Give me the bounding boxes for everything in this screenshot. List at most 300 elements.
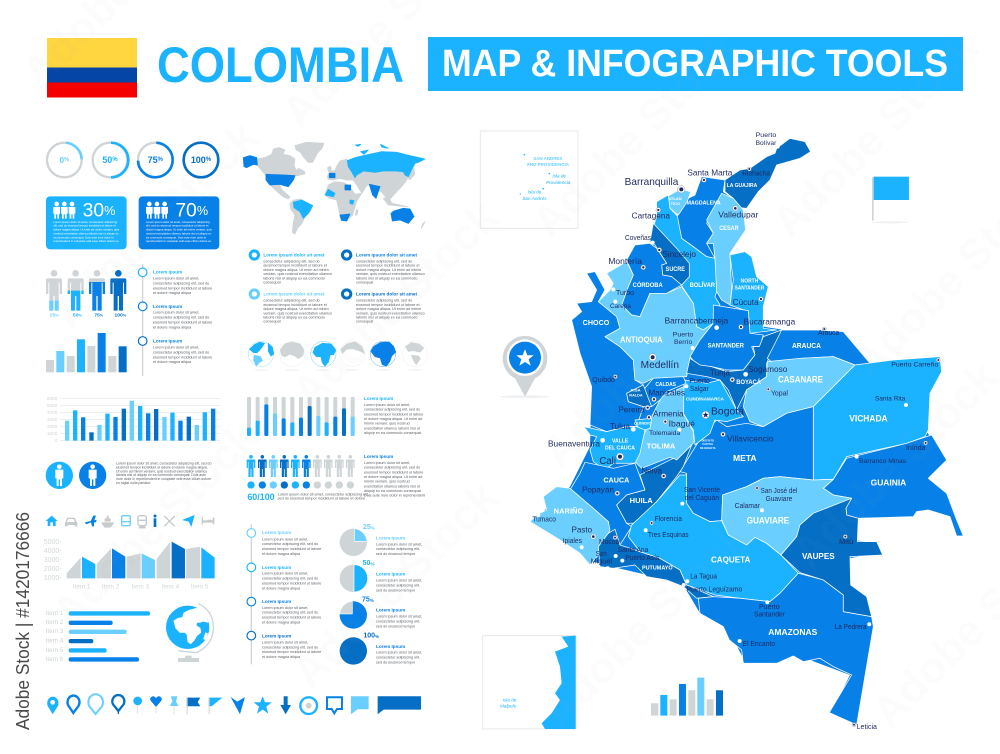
horizontal bar chart: Item 5: [46, 647, 64, 654]
paragraph beside badges: Lorem ipsum dolor sit amet, consectetur adipiscing elit, sed do: [116, 461, 211, 465]
city labels: Coveñas: [625, 235, 651, 242]
department labels: ANTIOQUIA: [620, 335, 663, 345]
department labels: CHOCO: [583, 318, 609, 327]
city labels: Medellín: [641, 360, 679, 371]
text: people row: eiusmod tempor incididunt ut labore: [364, 470, 423, 474]
city labels: Armenia: [653, 408, 684, 418]
city labels: Puerto Leguízamo: [687, 586, 742, 593]
paragraph beside badges: [116, 461, 211, 485]
timeline with four entries: consectetur adipiscing elit, sed do: [262, 577, 318, 581]
text: people row: exercitation ullamco laboris nisi ut: [364, 484, 421, 488]
text: people row: [364, 454, 426, 498]
percent pies with text: consectetur adipiscing elit,: [376, 547, 420, 551]
middle column, upper part: [248, 251, 428, 371]
department labels: SANTANDER: [708, 344, 745, 350]
department labels: VAUPES: [802, 551, 835, 561]
department labels: VICHADA: [849, 413, 888, 423]
area column chart: Item 1: [73, 583, 91, 590]
percent rings: 0%: [59, 155, 69, 165]
multi-year bar chart: 0: [55, 438, 58, 443]
city labels: El Encanto: [743, 641, 775, 648]
card: 30 percent: nostrud exercitation ullamco laboris nisi ut aliquip ex: [53, 231, 119, 235]
timeline with four entries: Lorem Ipsum: [262, 633, 291, 638]
timeline with four entries: consectetur adipiscing elit, sed do: [262, 645, 318, 649]
department labels: CASANARE: [778, 375, 823, 385]
area column chart: 1000-: [44, 575, 62, 582]
city labels: Riohacha: [742, 170, 770, 177]
department labels: NARIÑO: [554, 506, 583, 515]
city labels: La Pedrera: [835, 624, 867, 631]
transport and travel icons: [46, 514, 214, 528]
city labels: Puerto: [756, 132, 777, 139]
location pin with star: [500, 336, 550, 398]
four key-point text blocks: eiusmod tempor incididunt ut labore et: [263, 264, 328, 268]
card: 70 percent: [139, 196, 219, 249]
department labels: MAGDALENA: [687, 200, 721, 206]
text: people row: minim veniam, quis nostrud: [364, 480, 410, 484]
text: people row: et dolore magna aliqua. Ut enim ad: [364, 475, 422, 479]
city labels: Santa Marta: [687, 168, 732, 178]
text: progress bars: Lorem Ipsum: [364, 396, 393, 401]
four key-point text blocks: consequat: [263, 320, 282, 324]
watermark: Adobe Stock: [523, 22, 748, 247]
percent pies with text: Lorem Ipsum: [376, 644, 405, 649]
department labels: CUNDINAMARCA: [686, 397, 724, 403]
four key-point text blocks: consectetur adipiscing elit, sed do: [356, 299, 412, 303]
department labels: SUCRE: [666, 266, 685, 273]
timeline with three entries: eiusmod tempor incididunt ut labore: [153, 286, 212, 290]
four key-point text blocks: Lorem ipsum dolor sit amet: [263, 291, 325, 296]
four key-point text blocks: laboris nisi ut aliquip ex ea commodo: [356, 315, 417, 319]
city labels: San José del: [761, 488, 798, 495]
card: 30 percent: 30%: [83, 200, 115, 221]
timeline with four entries: Lorem Ipsum: [262, 565, 291, 570]
percent pies with text: 100%: [363, 632, 380, 639]
city labels: Mocoa: [599, 539, 619, 546]
timeline with four entries: eiusmod tempor incididunt ut labore: [262, 616, 321, 620]
row of six globes: [248, 341, 428, 371]
timeline with three entries: et dolore magna aliqua: [153, 325, 192, 329]
city labels: Santa Ana: [618, 547, 648, 554]
horizontal bar chart: Item 1: [46, 610, 64, 617]
city labels: Montería: [608, 256, 642, 266]
card: 70 percent: dolore magna aliqua. Ut enim ad minim veniam, quis: [146, 228, 212, 232]
card: 70 percent: nostrud exercitation ullamco laboris nisi ut aliquip ex: [146, 231, 212, 235]
card: 30 percent: Lorem ipsum dolor sit amet, consectetur adipiscing: [53, 220, 117, 224]
city labels: Neiva: [641, 465, 662, 475]
horizontal bar chart: Item 2: [46, 619, 64, 626]
department labels: CESAR: [719, 225, 739, 232]
four key-point text blocks: consectetur adipiscing elit, sed do: [263, 260, 320, 264]
people percent figures: 100%: [115, 312, 127, 318]
watermark: Adobe Stock: [763, 22, 988, 247]
four key-point text blocks: veniam, quis nostrud exercitation ullamco: [356, 272, 425, 276]
city labels: Puerto: [759, 604, 780, 611]
area column chart: 5000-: [44, 539, 62, 546]
city labels: Florencia: [655, 516, 682, 523]
card: 70 percent: 70%: [175, 200, 208, 221]
city labels: Tres Esquinas: [648, 532, 689, 539]
60 of 100 people row: 60/100: [247, 492, 275, 502]
timeline with three entries: consectetur adipiscing elit, sed do: [153, 281, 209, 285]
text: people row: Lorem Ipsum: [364, 454, 393, 459]
department labels: NORTH: [741, 279, 758, 285]
horizontal bar chart: Item 6: [46, 656, 64, 663]
department labels: ARAUCA: [792, 341, 821, 350]
timeline with four entries: eiusmod tempor incididunt ut labore: [262, 650, 321, 654]
four key-point text blocks: dolore magna aliqua. Ut enim ad minim: [356, 307, 421, 311]
four key-point text blocks: consequat: [356, 280, 374, 284]
card: 70 percent: reprehenderit in voluptate velit esse cillum dolore eu: [146, 239, 212, 243]
city labels: Salgar: [690, 386, 709, 393]
department labels: PUTUMAYO: [642, 565, 673, 571]
percent pies with text: consectetur adipiscing elit,: [376, 583, 420, 587]
timeline with three entries: et dolore magna aliqua: [153, 360, 192, 364]
department labels: TICO: [671, 201, 680, 206]
paragraph beside badges: Ut enim ad minim veniam, quis nostrud exercitation ullamco: [116, 469, 207, 473]
map pin icon set, left: [47, 694, 245, 714]
department labels: DEL CAUCA: [605, 445, 635, 451]
percent pies with text: sed do eiusmod tempor: [376, 624, 416, 628]
city labels: del Caguán: [685, 495, 719, 502]
four key-point text blocks: dolore magna aliqua. Ut enim ad minim: [263, 268, 329, 272]
timeline with four entries: et dolore magna aliqua: [262, 586, 301, 590]
text: progress bars: Lorem ipsum dolor sit amet,: [364, 403, 410, 407]
timeline with four entries: et dolore magna aliqua: [262, 620, 301, 624]
timeline with four entries: Lorem ipsum dolor sit amet,: [262, 572, 308, 576]
four key-point text blocks: consectetur adipiscing elit, sed do: [356, 260, 412, 264]
department labels: BOLÍVAR: [690, 280, 715, 289]
percent pies with text: 25%: [363, 524, 376, 531]
vertical progress bars: [247, 397, 355, 436]
bar chart: [46, 333, 127, 372]
city labels: Puerto: [689, 378, 710, 385]
flag pin: [872, 177, 909, 223]
people percent figures: 50%: [73, 312, 82, 318]
city labels: Ibagué: [669, 418, 695, 428]
city labels: Sogamoso: [748, 364, 788, 374]
city labels: Tulua: [610, 421, 630, 431]
department labels: DISTRITO: [702, 438, 714, 442]
city labels: Popayán: [582, 485, 614, 495]
city labels: Pereira: [618, 405, 645, 415]
text: progress bars: exercitation ullamco laboris nisi ut: [364, 426, 421, 430]
people percent figures: 75%: [94, 312, 104, 318]
multi-year bar chart: 1000: [47, 431, 58, 436]
percent pies with text: [340, 524, 422, 665]
stock id side label: Adobe Stock | #1420176666: [13, 512, 33, 730]
city labels: San Vicente: [684, 487, 720, 494]
city labels: Cartagena: [632, 211, 670, 221]
text: progress bars: aliquip ex ea commodo consequat.: [364, 431, 422, 435]
percent pies with text: Lorem ipsum dolor sit amet,: [376, 651, 422, 655]
card: 30 percent: reprehenderit in voluptate velit esse cillum dolore eu: [53, 239, 119, 243]
timeline with four entries: Lorem ipsum dolor sit amet,: [262, 606, 308, 610]
department labels: RISA: [631, 389, 641, 393]
four key-point text blocks: consectetur adipiscing elit, sed do: [263, 299, 320, 303]
city labels: Miguel: [591, 558, 612, 565]
text: progress bars: eiusmod tempor incididunt ut labore: [364, 412, 423, 416]
timeline with three entries: Lorem Ipsum: [153, 338, 182, 343]
timeline with three entries: Lorem Ipsum: [153, 304, 182, 309]
department labels: CALDAS: [655, 382, 676, 388]
timeline with four entries: Lorem Ipsum: [262, 530, 291, 535]
department labels: HUILA: [630, 496, 653, 505]
watermark: Adobe Stock: [533, 252, 758, 477]
inset: Isla de Malpelo: Isla de: [503, 697, 517, 702]
card: 70 percent: Lorem ipsum dolor sit amet, consectetur adipiscing: [146, 220, 210, 224]
city labels: Buenaventura: [548, 439, 600, 449]
four key-point text blocks: consequat: [356, 320, 374, 324]
people badges: [46, 462, 106, 489]
multi-year bar chart: [47, 396, 220, 443]
multi-year bar chart: 2000: [47, 424, 58, 429]
city labels: Tunja: [710, 368, 730, 378]
watermark: Adobe Stock: [283, 192, 508, 417]
four key-point text blocks: dolore magna aliqua. Ut enim ad minim: [263, 307, 329, 311]
card: 70 percent: elit, sed do eiusmod tempor incididunt ut labore et: [146, 224, 209, 228]
timeline with four entries: consectetur adipiscing elit, sed do: [262, 611, 318, 615]
percent pies with text: Lorem ipsum dolor sit amet,: [376, 615, 422, 619]
percent pies with text: Lorem ipsum dolor sit amet,: [376, 542, 422, 546]
department labels: META: [733, 453, 757, 463]
city labels: Santa Rita: [875, 395, 906, 402]
paragraph beside badges: eiusmod tempor incididunt ut labore et dolore magna aliqua.: [116, 465, 208, 469]
percent rings: 75%: [148, 155, 164, 165]
percent pies with text: Lorem ipsum dolor sit amet,: [376, 578, 422, 582]
timeline with three entries: Lorem Ipsum: [153, 269, 182, 274]
department labels: AMAZONAS: [768, 627, 818, 637]
percent pies with text: Lorem Ipsum: [376, 535, 405, 540]
country silhouette under departments: [533, 213, 947, 720]
paragraph beside badges: irure dolor in reprehenderit in voluptate velit esse cillum dolore: [116, 477, 211, 481]
multi-year bar chart: 3000: [47, 417, 58, 422]
city labels: Puerto Carreño: [891, 361, 939, 368]
area column chart: 2000-: [44, 566, 62, 573]
timeline with four entries: [247, 524, 321, 664]
text: progress bars: minim veniam, quis nostrud: [364, 422, 410, 426]
city labels: San: [596, 551, 607, 558]
four key-point text blocks: Lorem ipsum dolor sit amet: [263, 252, 325, 257]
department labels: ATLAN: [668, 196, 682, 201]
area column chart: [44, 539, 215, 590]
inset: Isla de Malpelo: Malpelo: [500, 703, 517, 708]
text: progress bars: consectetur adipiscing elit, sed do: [364, 408, 420, 412]
percent pies with text: Lorem Ipsum: [376, 571, 405, 576]
inset: San Andres and Providencia: Isla de: [552, 173, 566, 178]
city labels: Arauca: [818, 330, 839, 337]
paragraph beside badges: laboris nisi ut aliquip ex ea commodo consequat. Duis aute: [116, 473, 206, 477]
timeline with four entries: eiusmod tempor incididunt ut labore: [262, 547, 321, 551]
four key-point text blocks: laboris nisi ut aliquip ex ea commodo: [263, 315, 325, 319]
map pin icon set, right: [254, 696, 421, 714]
city labels: Pasto: [572, 525, 592, 535]
percent pies with text: Lorem Ipsum: [376, 607, 405, 612]
city labels: Bolívar: [756, 140, 777, 147]
multi-year bar chart: 5000: [47, 403, 58, 408]
inset: Isla de Malpelo: [483, 636, 576, 729]
card: 30 percent: elit, sed do eiusmod tempor incididunt ut labore et: [53, 224, 116, 228]
city labels: Bogotá: [711, 406, 744, 417]
city labels: Ipiales: [563, 538, 582, 545]
four key-point text blocks: veniam, quis nostrud exercitation ullamco: [263, 272, 332, 276]
city labels: Santander: [754, 611, 786, 618]
city labels: Calamar: [735, 503, 761, 510]
timeline with four entries: et dolore magna aliqua: [262, 552, 301, 556]
area column chart: Item 2: [102, 583, 120, 590]
department labels: RALDA: [629, 394, 643, 398]
city labels: Barrancabermeja: [665, 315, 729, 325]
city labels: Mitú: [839, 539, 853, 546]
timeline with three entries: eiusmod tempor incididunt ut labore: [153, 355, 212, 359]
department labels: GUAVIARE: [747, 516, 789, 526]
department labels: [554, 183, 906, 637]
percent pies with text: sed do eiusmod tempor: [376, 588, 416, 592]
four key-point text blocks: laboris nisi ut aliquip ex ea commodo: [263, 276, 325, 280]
area column chart: Item 4: [162, 583, 180, 590]
timeline with three entries: Lorem ipsum dolor sit amet,: [153, 276, 199, 280]
people percent figures: 25%: [50, 312, 59, 318]
department labels: BOYACÁ: [736, 377, 761, 386]
city labels: Berrío: [674, 339, 693, 346]
city labels: Quibdó: [592, 377, 615, 384]
title: Colombia: COLOMBIA: [157, 37, 404, 93]
left column, lower part: [44, 396, 245, 714]
four key-point text blocks: Lorem ipsum dolor sit amet: [356, 252, 417, 257]
text: progress bars: [364, 396, 423, 435]
city labels: Tumaco: [532, 516, 556, 523]
city markers: [536, 145, 940, 727]
four key-point text blocks: eiusmod tempor incididunt ut labore et: [356, 264, 421, 268]
four key-point text blocks: Lorem ipsum dolor sit amet: [356, 291, 417, 296]
city labels: Tolemaida: [649, 430, 681, 437]
department labels: VALLE: [612, 438, 629, 444]
city labels: Carepa: [610, 303, 631, 310]
colored departments: [530, 138, 963, 725]
inset: San Andres and Providencia: AND PROVIDENCIA: [527, 162, 570, 167]
four key-point text blocks: laboris nisi ut aliquip ex ea commodo: [356, 276, 417, 280]
city labels: Barranco Minas: [859, 458, 907, 465]
city labels: Bucaramanga: [744, 316, 796, 326]
department labels: QUINDIO: [634, 421, 652, 425]
department labels: TOLIMA: [647, 441, 676, 450]
department labels: CÓRDOBA: [633, 280, 663, 289]
card: 30 percent: ea commodo consequat. Duis aute irure dolor in: [53, 235, 114, 239]
card: 30 percent: [46, 196, 127, 249]
city labels: Inírida: [906, 445, 926, 452]
four key-point text blocks: eiusmod tempor incididunt ut labore et: [356, 303, 421, 307]
timeline with three entries: consectetur adipiscing elit, sed do: [153, 316, 209, 320]
Colombia map with insets: [480, 131, 963, 731]
percent pies with text: consectetur adipiscing elit,: [376, 619, 420, 623]
city labels: Villavicencio: [727, 433, 774, 443]
horizontal bar chart: [46, 610, 150, 663]
department labels: CAPITAL: [702, 442, 714, 446]
text: people row: aliquip ex ea commodo consequat.: [364, 489, 422, 493]
city labels: Valledupar: [718, 209, 758, 219]
timeline with three entries: Lorem ipsum dolor sit amet,: [153, 311, 199, 315]
city labels: [532, 132, 939, 731]
watermark: Adobe Stock: [43, 112, 268, 337]
timeline with three entries: [138, 264, 212, 376]
60 of 100 people row: sed do eiusmod tempor incididunt ut labore et dolore: [278, 497, 365, 501]
60 of 100 people row: Lorem ipsum dolor sit amet, consectetur adipiscing elit,: [278, 492, 369, 496]
department labels: CAQUETA: [711, 555, 750, 565]
inset: San Andres and Providencia: San Andrés: [522, 196, 547, 201]
city labels: Manizales: [648, 388, 685, 398]
four key-point text blocks: veniam, quis nostrud exercitation ullamco: [263, 311, 332, 315]
watermark: Adobe Stock: [283, 472, 508, 697]
four key-point text blocks: veniam, quis nostrud exercitation ullamco: [356, 311, 425, 315]
inset: San Andres and Providencia: Providencia: [546, 180, 571, 185]
paragraph beside badges: eu fugiat nulla pariatur.: [116, 481, 151, 485]
watermark: Adobe Stock: [43, 412, 268, 637]
area column chart: Item 3: [132, 583, 150, 590]
department labels: SANTANDER: [735, 285, 764, 291]
timeline with four entries: Lorem Ipsum: [262, 599, 291, 604]
people percent figures: [46, 270, 127, 318]
timeline with four entries: Lorem ipsum dolor sit amet,: [262, 640, 308, 644]
text: progress bars: et dolore magna aliqua. Ut enim ad: [364, 417, 422, 421]
city labels: La Tagua: [690, 573, 717, 580]
area column chart: 3000-: [44, 557, 62, 564]
city labels: Yopal: [771, 390, 788, 397]
four key-point text blocks: consequat: [263, 280, 282, 284]
percent rings: 50%: [102, 155, 118, 165]
text: people row: consectetur adipiscing elit, sed do: [364, 466, 420, 470]
city labels: Leticia: [857, 724, 877, 731]
desk globe: [166, 603, 213, 662]
small bar chart under map: [651, 678, 723, 716]
department labels: GUAINIA: [871, 477, 906, 487]
world map: [243, 142, 425, 234]
city labels: Turbo: [616, 290, 634, 297]
timeline with three entries: eiusmod tempor incididunt ut labore: [153, 321, 212, 325]
city labels: Guaviare: [766, 496, 792, 503]
inset: San Andres and Providencia: SAN ANDRES: [533, 156, 562, 161]
percent pies with text: sed do eiusmod tempor: [376, 660, 416, 664]
city labels: Puerto Asís: [625, 555, 660, 562]
horizontal bar chart: Item 4: [46, 637, 64, 644]
department labels: LA GUAJIRA: [727, 183, 757, 189]
percent pies with text: consectetur adipiscing elit,: [376, 656, 420, 660]
city labels: Puerto: [673, 331, 694, 338]
timeline with three entries: consectetur adipiscing elit, sed do: [153, 350, 209, 354]
four key-point text blocks: [250, 251, 425, 324]
subtitle banner: MAP & INFOGRAPHIC TOOLS: [442, 43, 948, 85]
department labels: DE BOGOTA: [700, 446, 716, 450]
multi-year bar chart: 6000: [47, 396, 58, 401]
watermark: Adobe Stock: [533, 512, 758, 737]
60 of 100 people row: [247, 455, 369, 502]
percent rings: 100%: [191, 155, 212, 165]
percent pies with text: 75%: [362, 596, 375, 603]
inset: San Andres and Providencia: [480, 131, 578, 228]
inset: San Andres and Providencia: Isla de: [528, 189, 542, 194]
percent pies with text: sed do eiusmod tempor: [376, 552, 416, 556]
timeline with four entries: et dolore magna aliqua: [262, 655, 301, 659]
percent rings: [47, 143, 218, 177]
four key-point text blocks: eiusmod tempor incididunt ut labore et: [263, 303, 328, 307]
horizontal bar chart: Item 3: [46, 628, 64, 635]
city labels: Cúcuta: [733, 297, 759, 307]
text: people row: Duis aute irure dolor in reprehenderit: [364, 494, 426, 498]
left column, upper part: [46, 143, 219, 376]
four key-point text blocks: dolore magna aliqua. Ut enim ad minim: [356, 268, 421, 272]
area column chart: Item 5: [191, 583, 209, 590]
timeline with three entries: et dolore magna aliqua: [153, 291, 192, 295]
timeline with four entries: eiusmod tempor incididunt ut labore: [262, 581, 321, 585]
